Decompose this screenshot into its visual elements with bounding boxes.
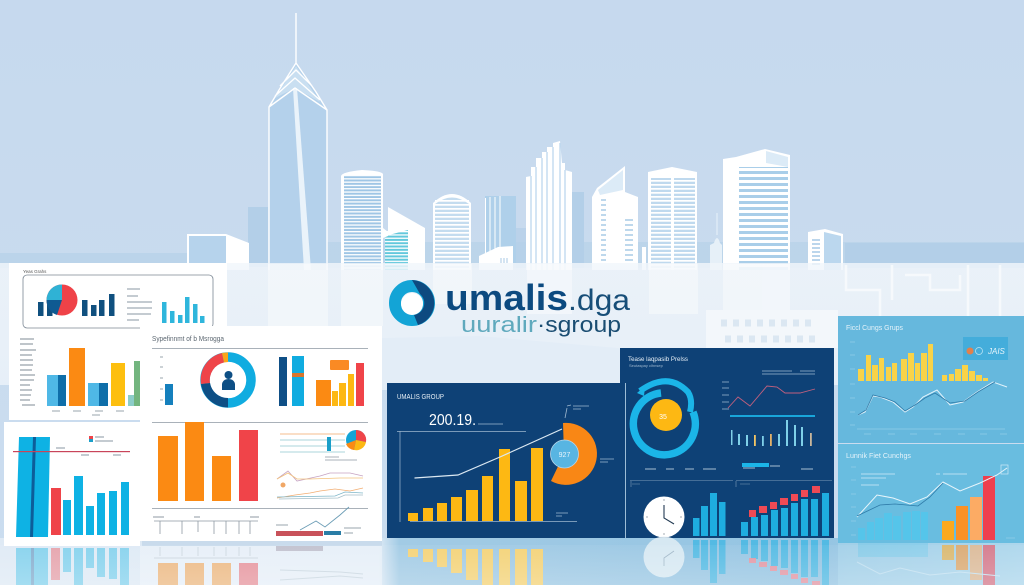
- low block left: [187, 234, 249, 270]
- main spire tower: [269, 13, 327, 270]
- reflection: yellow bars: [408, 549, 543, 585]
- cyan bar chart: [16, 437, 129, 537]
- dark line: [857, 483, 943, 516]
- clock: [644, 496, 684, 538]
- faint background buildings: [0, 192, 1024, 268]
- wide striped tower: [648, 167, 697, 270]
- inset stat box: [963, 337, 1008, 360]
- small bar: [160, 357, 173, 405]
- ring gauge: [633, 381, 695, 455]
- coloured bar chart: [47, 348, 140, 406]
- ring gauge: 35: [659, 414, 667, 421]
- small legends: [556, 405, 614, 516]
- line chart: [722, 371, 815, 416]
- threshold labels: [56, 448, 121, 455]
- tall white tower right: [723, 149, 790, 270]
- inset stat box: JAIS: [987, 347, 1006, 356]
- legend row: [645, 466, 813, 469]
- white line: [857, 468, 1007, 517]
- heading: Sypefinnmt of b Msrogga: [152, 334, 225, 343]
- cyan bars beside clock: [693, 493, 726, 536]
- timeline: [153, 517, 259, 534]
- angled roof tower: [592, 166, 646, 270]
- yellow bar chart: [408, 448, 543, 521]
- headline number: 200.19.: [429, 412, 476, 429]
- framed chart box: [23, 275, 213, 328]
- panel: navy revenue dashboard: [387, 383, 626, 538]
- donut chart with person icon: [201, 352, 251, 408]
- pale wedge below logo: [382, 336, 640, 390]
- navy bars: [38, 294, 114, 316]
- panel title: Tease laqpasib Prelss: [628, 356, 689, 363]
- legend lines: [127, 289, 152, 320]
- blue bars: [858, 511, 928, 540]
- cyan bars: [162, 297, 204, 323]
- reflections on floor: [0, 536, 1024, 585]
- panel title: Ficcl Cungs Grups: [846, 325, 903, 332]
- panel: bottom-left bars: [4, 422, 140, 546]
- panel title: Lunnik Fiet Cunchgs: [846, 453, 911, 460]
- reflection: red markers: [749, 558, 820, 585]
- yellow bars: [858, 344, 988, 381]
- rounded tower: [433, 194, 471, 270]
- narrow tower: [479, 196, 516, 270]
- icon: person: [222, 371, 235, 390]
- wedge building: [383, 207, 425, 270]
- side legend: [20, 339, 36, 405]
- logo: [395, 277, 630, 337]
- stacked bars: [279, 356, 304, 406]
- panel heading: Yeas Grahs: [23, 269, 47, 274]
- reflection: left cyan bars: [16, 548, 129, 585]
- reflection: clock: [644, 536, 684, 578]
- antenna building: [710, 213, 722, 270]
- red threshold line: [13, 451, 130, 452]
- logo wordmark suffix: .dga: [568, 284, 630, 317]
- striped tower: [341, 170, 383, 270]
- logo ring icon: [395, 280, 434, 325]
- faint circuit lines: [846, 265, 1000, 316]
- logo wordmark line one: umalis: [445, 277, 568, 318]
- area line: [858, 382, 1007, 415]
- small block right: [808, 229, 843, 270]
- bars with red markers: [741, 486, 829, 536]
- finned tower: [526, 141, 572, 270]
- orange gauge: [550, 423, 597, 485]
- panel subtitle: Seutaspay clhnsep: [629, 363, 664, 368]
- axis labels: [52, 411, 124, 415]
- reflection: cyan bars: [693, 540, 829, 585]
- legend lines: [861, 474, 967, 485]
- dark line: [858, 382, 995, 415]
- reflection: central report: [140, 546, 382, 585]
- pie chart: [46, 284, 78, 316]
- reflection: right orange bars: [838, 543, 1024, 585]
- pale translucent band: [0, 263, 1024, 385]
- panel: light blue top chart: [838, 316, 1024, 443]
- tiny bar strip: [731, 420, 812, 446]
- panel: navy analytics dashboard: [620, 348, 834, 538]
- multi-line chart: [277, 471, 363, 499]
- rising orange bars: [316, 360, 364, 406]
- rising line with bar: [276, 507, 361, 536]
- logo wordmark line two: uuralir: [461, 312, 537, 337]
- orange-red bars: [942, 476, 995, 540]
- large bar chart: [158, 422, 258, 501]
- panel title: UMALIS GROUP: [397, 392, 444, 401]
- panel: light blue bottom chart: [838, 444, 1024, 543]
- cyan progress bar: [742, 463, 769, 467]
- orange gauge: 927: [559, 452, 570, 459]
- faint building ghosts through band: [268, 264, 790, 326]
- panel: top-left report: [9, 263, 227, 420]
- logo wordmark group: ·sgroup: [537, 312, 621, 337]
- legend: [89, 436, 113, 442]
- pale building with windows: [706, 310, 838, 348]
- gridline labels: [850, 342, 1007, 434]
- white trend line: [414, 429, 562, 478]
- reflective floor: [0, 538, 1024, 585]
- skyline illustration: [0, 13, 1024, 390]
- panel: central white report: [140, 326, 382, 546]
- chart with pie: [280, 430, 366, 460]
